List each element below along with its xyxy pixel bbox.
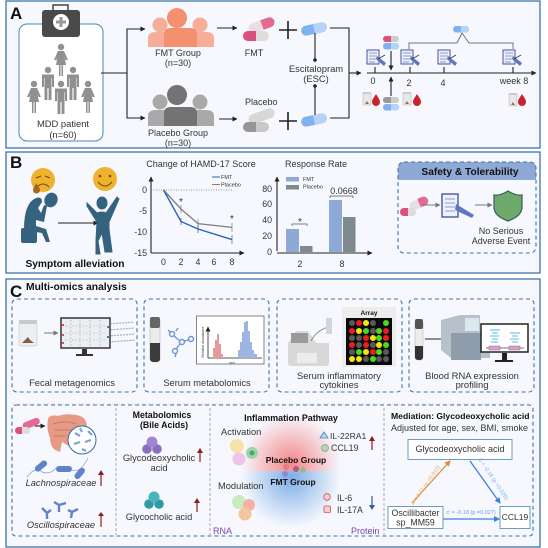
plus sign top (279, 21, 297, 39)
inflammation column: Protein (351, 526, 380, 536)
icon: intestine (47, 414, 87, 452)
icon: activation cells (230, 439, 258, 466)
HAMD-17 line chart: * (179, 197, 183, 208)
HAMD-17 line chart: 6 (212, 257, 217, 267)
mass spectrum plot: m/z (229, 361, 235, 365)
HAMD-17 line chart (134, 159, 256, 267)
placebo group label: Placebo Group (148, 128, 208, 138)
HAMD-17 line chart: -5 (139, 206, 147, 216)
icon: FMT pill (15, 417, 41, 434)
card: fecal metagenomics (12, 299, 137, 392)
down-regulated markers (324, 493, 375, 515)
response rate bar chart: 8 (340, 259, 345, 269)
icon: FMT group (148, 8, 214, 47)
arrow: increase (98, 512, 104, 527)
icon: magnified microbes (68, 426, 96, 454)
FMT group label: FMT Group (155, 48, 201, 58)
inflammation column: FMT Group (270, 477, 316, 487)
arrow: increase (197, 448, 203, 462)
timeline axis: week 8 (499, 76, 528, 86)
path a: a = 0.21 (p =0.010) (410, 464, 442, 506)
icon: medical briefcase (42, 5, 80, 37)
microbiome column (15, 414, 104, 530)
icon: metabolite molecules (168, 328, 194, 357)
icon: sitting figure (21, 190, 60, 243)
inflammation column (213, 413, 380, 536)
down-regulated markers: IL-17A (337, 505, 363, 515)
up-regulated markers (320, 431, 375, 453)
legend: FMT (221, 175, 233, 181)
FMT group label: (n=30) (165, 58, 191, 68)
icon: standing figure (87, 196, 119, 254)
placebo label: Placebo (245, 97, 278, 107)
inflammation column: RNA (213, 526, 232, 536)
node: oscillibacter: sp_MM59 (396, 518, 435, 528)
icon: sad face (31, 168, 55, 194)
panel C: multi-omics analysis (6, 279, 540, 547)
MDD label: (n=60) (49, 129, 77, 140)
response rate bar chart: 0 (267, 247, 272, 257)
card: serum cytokines: cytokines (319, 379, 359, 390)
mass spectrum plot: Relative abundance (201, 326, 205, 357)
inflammation column: Inflammation Pathway (244, 413, 338, 423)
response rate bar chart: 2 (298, 259, 303, 269)
arrows: randomisation (101, 29, 145, 118)
HAMD-17 line chart: 4 (196, 257, 201, 267)
down-regulated markers: IL-6 (337, 493, 352, 503)
node: glycodeoxycholic acid: Glycodeoxycholic acid (415, 444, 505, 454)
icon: Oscillospiraceae (42, 502, 78, 519)
icon: purple molecule (142, 436, 162, 454)
response rate bar chart: Response Rate (285, 159, 347, 169)
metabolomics column: Glycodeoxycholic (123, 453, 195, 463)
timeline axis: 4 (440, 78, 446, 88)
icon: sequencing monitor (61, 318, 110, 356)
panel A: study design (6, 1, 540, 148)
HAMD-17 line chart: 0 (161, 257, 166, 267)
card: serum cytokines: Serum inflammatory (297, 370, 381, 381)
metabolomics column: Metabolomics (133, 410, 191, 420)
card: serum metabolomics (144, 299, 269, 392)
icon: treatment pills top (383, 36, 399, 70)
icon: treatment pills bottom (383, 77, 399, 110)
legend: Placebo (221, 182, 241, 188)
legend (212, 175, 241, 188)
placebo series (164, 190, 232, 232)
icon: placebo group (148, 85, 214, 126)
sequence reads (110, 322, 134, 342)
panel letter A: A (10, 4, 22, 23)
response rate bar chart: * (298, 217, 302, 228)
icon: sequencer (441, 315, 490, 360)
icon: ESC capsule top (300, 21, 328, 37)
gradient blobs (244, 418, 338, 524)
ESC dosing bracket (409, 26, 513, 49)
path c (443, 510, 499, 519)
FMT label: FMT (245, 48, 264, 58)
inflammation column: Modulation (218, 481, 263, 491)
metabolomics column: acid (150, 463, 168, 473)
panel C title: Multi-omics analysis (26, 282, 127, 293)
Oscillospiraceae label: Oscillospiraceae (27, 520, 95, 530)
node: CCL19 (500, 506, 530, 528)
panel B: clinical outcomes (6, 152, 540, 273)
arrow: increase (194, 498, 200, 512)
card: fecal metagenomics: Fecal metagenomics (29, 378, 115, 388)
icon: happy face (93, 167, 117, 191)
card: serum cytokines (277, 299, 402, 392)
HAMD-17 line chart: 0 (142, 185, 147, 195)
metabolomics column: Glycocholic acid (126, 512, 192, 522)
column dividers (116, 408, 384, 535)
plus sign bottom (279, 112, 297, 130)
Lachnospiraceae label: Lachnospiraceae (26, 478, 96, 488)
timeline axis: 2 (406, 78, 412, 88)
card: blood RNA profiling: profiling (456, 379, 488, 390)
up-regulated markers: CCL19 (331, 443, 358, 453)
node: oscillibacter (388, 506, 443, 528)
safety text: No Serious (479, 226, 523, 236)
response rate bar chart (262, 159, 372, 269)
response rate bar chart: 80 (262, 184, 272, 194)
mass spectrum plot (196, 316, 264, 365)
icon: placebo capsules (243, 107, 276, 132)
icon: patients group (27, 44, 95, 114)
inflammation column: Activation (221, 427, 261, 437)
FMT series (164, 190, 232, 244)
response rate bar chart: 0.0668 (330, 186, 358, 196)
metabolomics column: (Bile Acids) (140, 420, 188, 430)
path b: b = -0.18 (p =0.025) (477, 458, 509, 501)
mediation column: Mediation: Glycodeoxycholic acid (391, 411, 530, 421)
HAMD-17 line chart: * (230, 214, 234, 225)
safety text: Adverse Event (472, 236, 531, 246)
icon: teal molecule (144, 492, 164, 509)
symptom alleviation label: Symptom alleviation (25, 259, 125, 270)
arrow to FMT (217, 27, 237, 29)
mediation column (388, 411, 530, 528)
icon: ESC capsule bottom (300, 112, 328, 128)
placebo group label: (n=30) (165, 138, 191, 148)
safety and tolerability card: Safety & Tolerability (421, 167, 519, 178)
timeline axis (367, 67, 536, 88)
card: blood RNA profiling: Blood RNA expression (425, 370, 519, 381)
RNA monitor (481, 324, 528, 362)
icon: modulation cells (232, 495, 255, 520)
panel letter B: B (10, 153, 22, 172)
arrow to placebo (219, 118, 237, 120)
response rate bar chart: 60 (262, 199, 272, 209)
icon: checklist form (442, 194, 474, 218)
response rate bar chart: 20 (262, 231, 272, 241)
HAMD-17 line chart: 2 (179, 257, 184, 267)
bracket and arrow to timeline (330, 28, 361, 118)
path c: c' = -0.18 (p =0.027) (446, 510, 496, 516)
arrow: increase (98, 470, 104, 486)
metabolomics column (123, 410, 203, 522)
legend: Placebo (303, 184, 323, 190)
panel letter C: C (10, 282, 22, 301)
card: serum metabolomics: Serum metabolomics (163, 378, 251, 388)
timeline axis: 0 (370, 76, 376, 86)
icon: Lachnospiraceae (27, 458, 88, 480)
icon: FMT capsules (243, 16, 276, 41)
MDD label: MDD patient (37, 118, 89, 129)
node: oscillibacter: Oscillibacter (392, 508, 439, 518)
HAMD-17 line chart: 8 (230, 257, 235, 267)
icon: pill (400, 195, 430, 216)
HAMD-17 line chart: -10 (134, 227, 147, 237)
legend: FMT (303, 177, 315, 183)
inflammation column: Placebo Group (266, 455, 326, 465)
icon: stool jar (19, 320, 37, 346)
node: glycodeoxycholic acid (408, 440, 512, 460)
icon: assessment forms (367, 50, 522, 66)
connectors to escitalopram (313, 33, 317, 115)
up-regulated markers: IL-22RA1 (330, 431, 367, 441)
arrow: improvement (58, 222, 98, 224)
icon: serum tube (150, 317, 160, 362)
results dashed box (12, 405, 533, 536)
icon: blood tube (415, 319, 423, 360)
escitalopram label: Escitalopram (289, 63, 343, 74)
HAMD-17 line chart: -15 (134, 248, 147, 258)
icon: shield (494, 191, 522, 221)
MDD patient box (19, 5, 103, 141)
faint separator (12, 403, 534, 405)
cytokine array: Array (361, 310, 378, 317)
escitalopram label: (ESC) (303, 73, 329, 84)
icon: array machine (288, 318, 332, 366)
mediation column: Adjusted for age, sex, BMI, smoke (391, 423, 528, 433)
node: CCL19: CCL19 (502, 512, 528, 522)
HAMD-17 line chart: Change of HAMD-17 Score (146, 159, 256, 169)
safety and tolerability card (398, 162, 536, 253)
card: blood RNA profiling (409, 299, 534, 392)
response rate bar chart: 40 (262, 215, 272, 225)
legend (286, 177, 323, 190)
sampling icons: stool and blood (363, 92, 526, 106)
